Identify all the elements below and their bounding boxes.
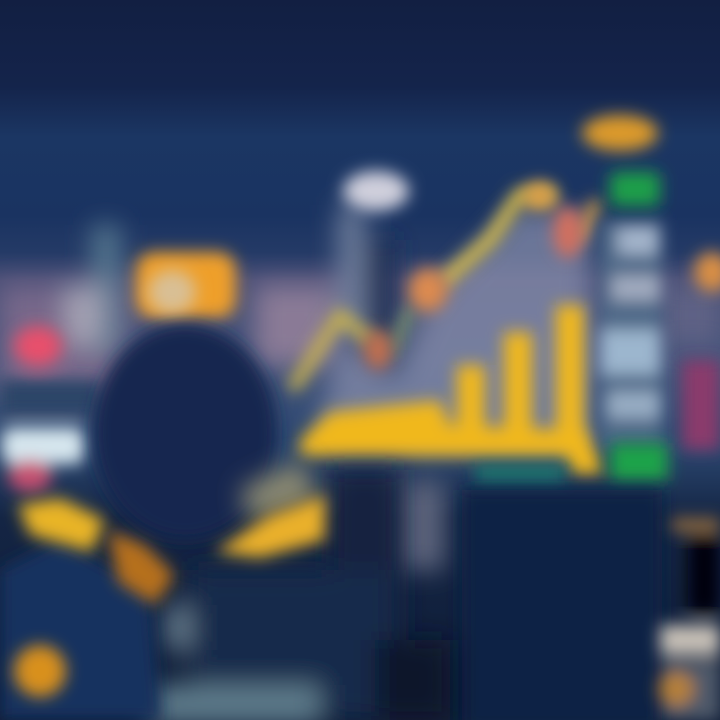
right edge details: [658, 252, 720, 720]
person: right collar: [215, 495, 325, 558]
tower top light: [343, 171, 409, 211]
person: face highlight: [148, 270, 196, 314]
bar chart: gold bars: [300, 305, 604, 474]
person: hair: [136, 252, 236, 318]
ticker column: [600, 220, 662, 445]
foreground dark buildings: [150, 470, 450, 720]
person: grey collar shadow: [240, 460, 320, 520]
ticker green markers: [475, 172, 668, 482]
left skyline lights: [0, 326, 100, 492]
chart panel: translucent area under the line: [320, 205, 590, 450]
person: round badge: [14, 645, 66, 697]
person: left collar: [18, 498, 105, 552]
person: orange strap: [108, 530, 175, 605]
person: [0, 252, 325, 720]
podium dark block: [462, 490, 662, 720]
city skyline haze: [0, 205, 720, 570]
person: shoulder: [0, 540, 160, 720]
chart: yellow trend line: [295, 195, 595, 385]
chart: orange and red markers: [364, 115, 658, 370]
person: head and back: [93, 324, 277, 540]
